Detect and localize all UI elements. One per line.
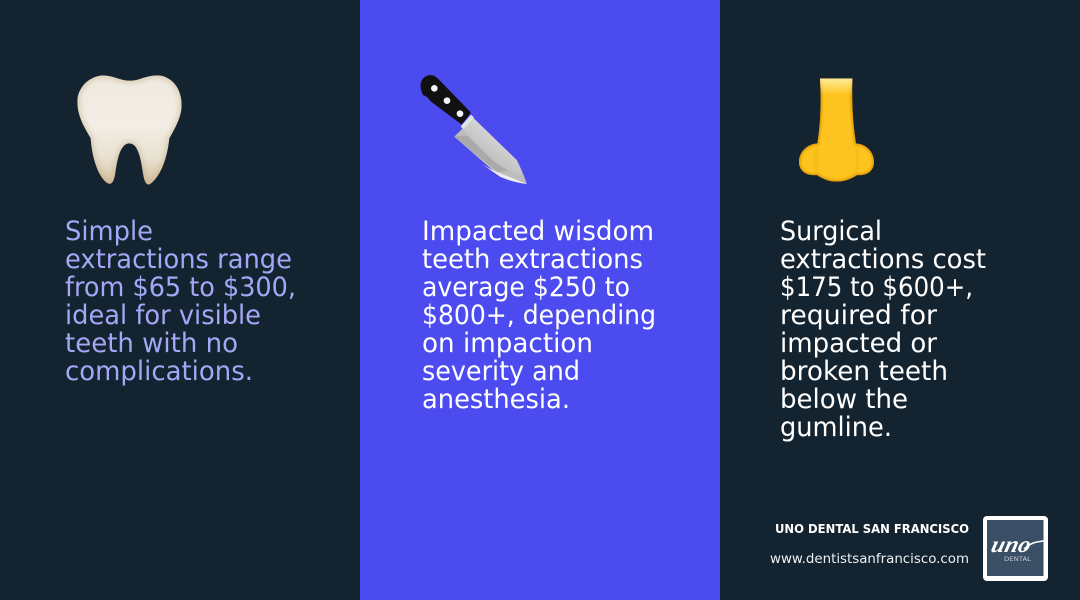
text block: surgical extractions (780, 216, 986, 443)
text block: simple extractions: complications. (65, 356, 253, 387)
brand name: UNO DENTAL SAN FRANCISCO (775, 521, 969, 536)
text block: surgical extractions: $175 to $600+, (780, 272, 973, 303)
icon: kitchen knife (421, 75, 527, 184)
text block: simple extractions: extractions range (65, 244, 292, 275)
text block: impacted wisdom teeth extractions (422, 216, 656, 415)
text block: impacted wisdom teeth extractions: Impacted wisdom (422, 216, 654, 247)
logo: Uno Dental: DENTAL (1004, 555, 1031, 563)
text block: surgical extractions: gumline. (780, 412, 892, 443)
icon: tooth (77, 75, 182, 184)
panel: centre background (360, 0, 720, 600)
text block: surgical extractions: extractions cost (780, 244, 986, 275)
logo: Uno Dental: uno (989, 532, 1034, 558)
text block: impacted wisdom teeth extractions: $800+, depending (422, 300, 656, 331)
text block: simple extractions: Simple (65, 216, 153, 247)
text block: impacted wisdom teeth extractions: on impaction (422, 328, 593, 359)
website address: www.dentistsanfrancisco.com (770, 551, 969, 567)
panel: left background (0, 0, 360, 600)
text block: simple extractions: from $65 to $300, (65, 272, 296, 303)
text block: impacted wisdom teeth extractions: average $250 to (422, 272, 630, 303)
text block: simple extractions: ideal for visible (65, 300, 261, 331)
text block: impacted wisdom teeth extractions: severity and (422, 356, 580, 387)
text block: impacted wisdom teeth extractions: anesthesia. (422, 384, 570, 415)
text block: surgical extractions: impacted or (780, 328, 938, 359)
text block: impacted wisdom teeth extractions: teeth extractions (422, 244, 643, 275)
text block: simple extractions (65, 216, 296, 387)
text block: surgical extractions: broken teeth (780, 356, 948, 387)
text block: surgical extractions: required for (780, 300, 938, 331)
panel: right background (720, 0, 1080, 600)
text block: surgical extractions: Surgical (780, 216, 882, 247)
icon: nose (799, 78, 874, 182)
text block: surgical extractions: below the (780, 384, 908, 415)
logo: Uno Dental (983, 516, 1048, 581)
text block: simple extractions: teeth with no (65, 328, 238, 359)
